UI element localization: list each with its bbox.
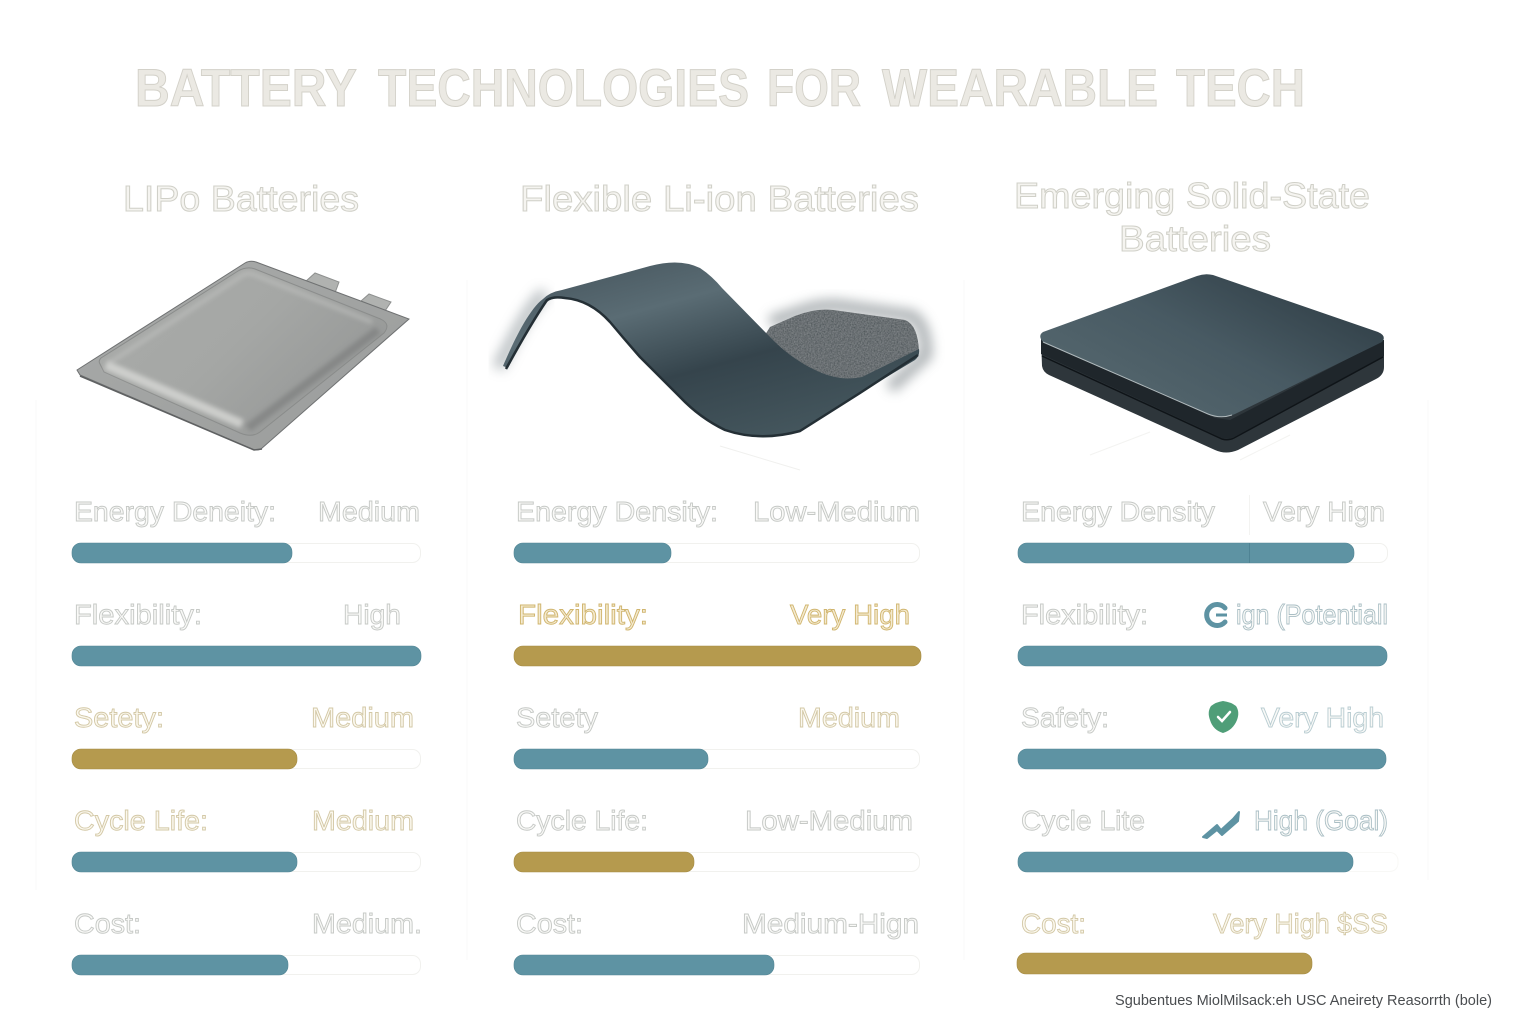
metric: safety: Medium <box>311 702 414 733</box>
metric: energy density: Medium <box>318 496 420 527</box>
metric: safety: Medium <box>798 702 900 733</box>
metric: cycle life: Medium <box>312 805 414 836</box>
metric: cycle life: Cycle Life: <box>516 805 648 836</box>
metric: safety: Setety: <box>74 702 164 733</box>
icon: flex loop <box>1207 605 1227 625</box>
metric: energy density: Energy Deneity: <box>74 496 276 527</box>
metric: energy density <box>72 496 420 563</box>
metric: cost: Medium-Hign <box>742 908 919 939</box>
metric: safety: Very High <box>1261 702 1384 733</box>
metric: cost: Cost: <box>516 908 583 939</box>
title: FOR <box>767 59 861 118</box>
metric: cycle life <box>514 805 920 872</box>
metric: flexibility <box>514 599 921 666</box>
metric: cycle life: Low-Medium <box>745 805 913 836</box>
title: WEARABLE <box>882 59 1158 118</box>
metric: cycle life: Cycle Lite <box>1021 805 1145 836</box>
heading: flexible Li-ion: Flexible Li-ion Batteries <box>520 178 919 219</box>
metric: flexibility: Very High <box>790 599 910 630</box>
heading: solid-state: Emerging Solid-State <box>1014 175 1370 216</box>
metric: energy density: Energy Density <box>1021 496 1215 527</box>
metric: cost: Cost: <box>74 908 141 939</box>
metric: safety <box>1018 701 1386 769</box>
metric: cycle life: High (Goal) <box>1254 805 1388 836</box>
metric: flexibility: Flexibility: <box>518 599 648 630</box>
metric: flexibility <box>72 599 421 666</box>
icon: safety shield <box>1209 701 1238 733</box>
metric: energy density <box>514 496 920 563</box>
title: TECH <box>1176 59 1305 118</box>
panel: emerging solid-state batteries <box>1014 175 1398 974</box>
source footnote: Sgubentues MiolMilsack:eh USC Aneirety Reasorrth (bole) <box>1115 992 1492 1009</box>
metric: cost <box>1017 908 1388 974</box>
heading: LiPo: LIPo Batteries <box>123 178 359 219</box>
metric: energy density <box>1018 495 1388 563</box>
metric: flexibility: ign (Potentiall <box>1236 599 1388 630</box>
metric: cycle life <box>1018 805 1398 872</box>
metric: energy density: Very Hign <box>1263 496 1385 527</box>
metric: safety <box>72 702 420 769</box>
image: flexible bent cell <box>498 262 926 470</box>
metric: cost <box>514 908 920 975</box>
metric: safety: Safety: <box>1021 702 1109 733</box>
faint column dividers <box>36 280 1428 960</box>
title: TECHNOLOGIES <box>378 59 749 118</box>
metric: safety <box>514 702 920 769</box>
metric: flexibility <box>1018 599 1388 666</box>
image: solid-state cell <box>1040 274 1384 460</box>
heading: solid-state second line: Batteries <box>1119 218 1271 259</box>
image: LiPo pouch cell <box>77 261 409 450</box>
metric: cost: Cost: <box>1021 908 1086 939</box>
panel: flexible Li-ion batteries <box>498 178 926 975</box>
panel: LiPo batteries <box>72 178 422 975</box>
metric: cost <box>72 908 422 975</box>
metric: flexibility: Flexibility: <box>74 599 202 630</box>
metric: cost: Medium. <box>312 908 422 939</box>
metric: cycle life <box>72 805 420 872</box>
metric: safety: Setety <box>516 702 598 733</box>
metric: cost: Very High $SS <box>1213 908 1388 939</box>
metric: flexibility: Flexibility: <box>1021 599 1148 630</box>
title: BATTERY <box>135 59 357 118</box>
metric: cycle life: Cycle Life: <box>74 805 208 836</box>
metric: flexibility: High <box>343 599 401 630</box>
metric: energy density: Low-Medium <box>753 496 920 527</box>
metric: energy density: Energy Density: <box>516 496 718 527</box>
icon: rising trend <box>1203 812 1239 838</box>
